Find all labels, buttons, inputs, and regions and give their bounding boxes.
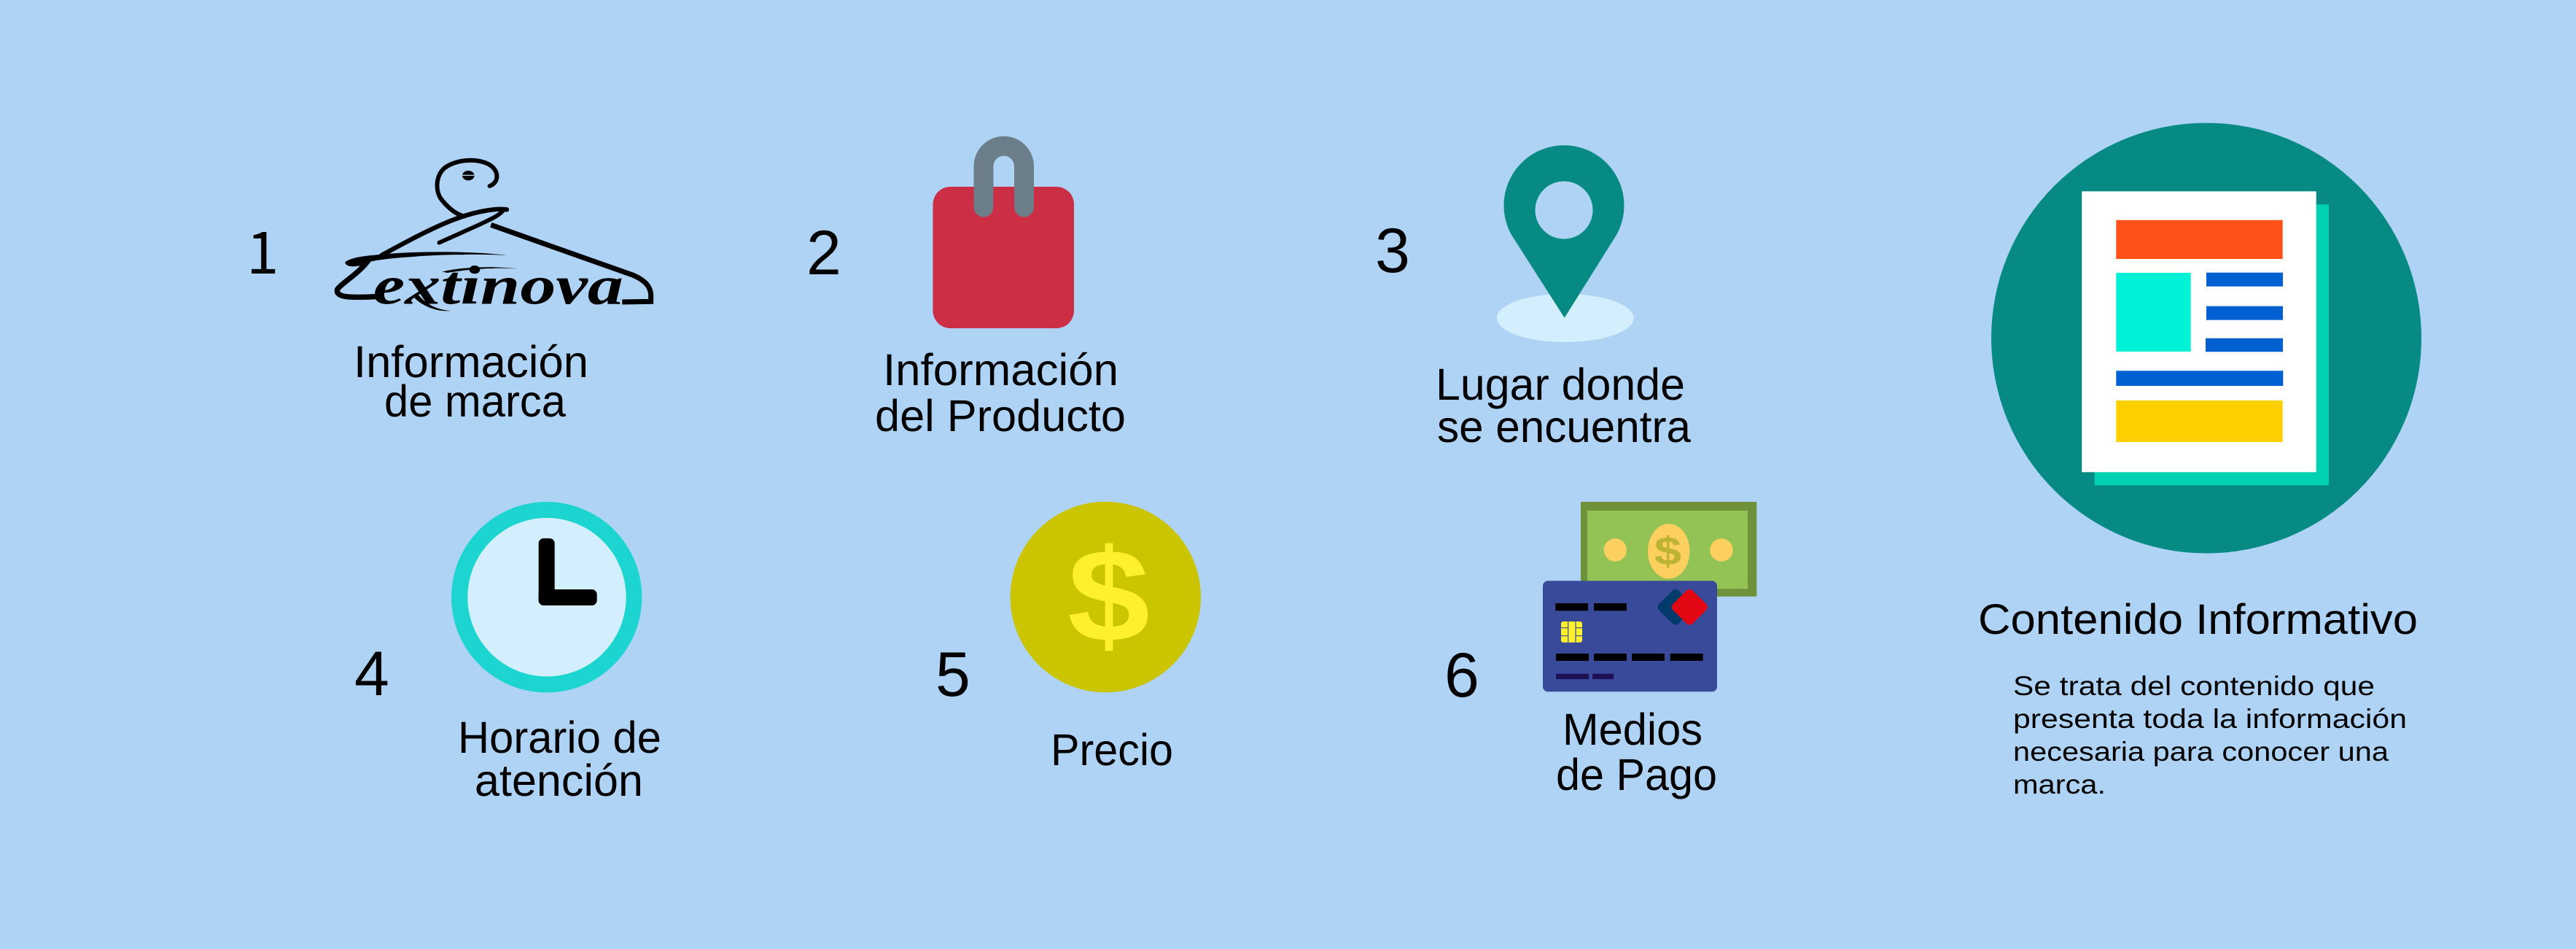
number 6: 6	[1444, 640, 1479, 710]
text block: description	[2013, 671, 2407, 799]
label: Información del Producto	[875, 345, 1126, 441]
icon: Textinova hanger logo: extinova	[373, 256, 623, 317]
label: Información del Producto: Información	[883, 345, 1118, 395]
text block: description: necesaria para conocer una	[2013, 737, 2389, 767]
label: Lugar donde se encuentra	[1436, 360, 1691, 452]
number 5: 5	[935, 640, 970, 710]
label: Medios de Pago	[1556, 705, 1717, 799]
number 4: 4	[354, 639, 389, 709]
label: Lugar donde se encuentra: se encuentra	[1437, 402, 1691, 452]
number 1: 1	[246, 206, 279, 291]
icon: credit card	[1543, 581, 1717, 692]
icon: banknote	[1581, 502, 1756, 597]
number 2: 2	[806, 218, 841, 288]
icon: location pin	[1497, 145, 1634, 342]
text block: description: marca.	[2013, 770, 2106, 799]
label: Medios de Pago: Medios	[1563, 705, 1703, 754]
label: Información de marca	[354, 337, 588, 426]
icon: banknote: $	[1654, 528, 1681, 573]
label: Medios de Pago: de Pago	[1556, 750, 1717, 799]
label: Precio: Precio	[1051, 725, 1173, 775]
label: Horario de atención: atención	[475, 756, 643, 805]
icon: banknote and credit card	[1543, 502, 1756, 692]
icon: shopping bag	[933, 146, 1074, 328]
label: Horario de atención	[458, 713, 661, 805]
label: Información de marca: de marca	[384, 376, 566, 426]
label: Información de marca: Información	[354, 337, 588, 387]
icon: informative document in teal circle	[1991, 123, 2421, 553]
icon: Textinova hanger logo	[337, 160, 651, 317]
text block: description: Se trata del contenido que	[2013, 671, 2375, 701]
icon: dollar coin: $	[1067, 522, 1150, 670]
label: Lugar donde se encuentra: Lugar donde	[1436, 360, 1685, 409]
label: Información del Producto: del Producto	[875, 391, 1126, 441]
text block: description: presenta toda la información	[2013, 704, 2407, 734]
icon: dollar coin	[1011, 502, 1201, 692]
label: Horario de atención: Horario de	[458, 713, 661, 762]
number 3: 3	[1375, 216, 1410, 286]
icon: clock	[451, 502, 642, 692]
heading: Contenido Informativo: Contenido Informativo	[1978, 596, 2418, 643]
